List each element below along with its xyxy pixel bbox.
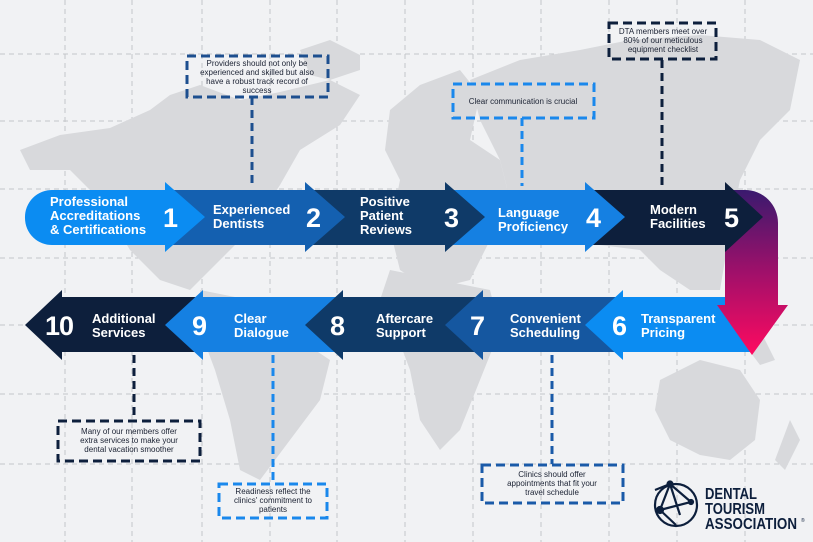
logo: TOURISM bbox=[705, 501, 765, 518]
logo: ® bbox=[801, 517, 805, 524]
top row labels: Positive bbox=[360, 194, 410, 209]
arrow 8 bbox=[305, 290, 485, 360]
callout: extra services: extra services to make your bbox=[80, 436, 178, 445]
arrow 3 bbox=[300, 182, 485, 252]
callout: readiness: patients bbox=[259, 505, 287, 514]
bottom row labels: Services bbox=[92, 325, 146, 340]
callout: readiness bbox=[219, 355, 327, 518]
callout: extra services: Many of our members offer bbox=[81, 427, 177, 436]
bottom row arrows bbox=[25, 290, 750, 360]
callout: communication: Clear communication is crucial bbox=[469, 97, 577, 106]
arrow 5 bbox=[580, 182, 763, 252]
bottom row labels: Scheduling bbox=[510, 325, 580, 340]
callout: providers: success bbox=[243, 86, 271, 95]
logo: ASSOCIATION bbox=[705, 516, 797, 533]
callout: readiness: Readiness reflect the bbox=[235, 487, 311, 496]
top row labels: 2 bbox=[306, 203, 321, 233]
arrow 4 bbox=[440, 182, 625, 252]
top row labels: Accreditations bbox=[50, 208, 140, 223]
arrow 2 bbox=[160, 182, 345, 252]
callout: scheduling bbox=[482, 355, 623, 503]
top row labels: Proficiency bbox=[498, 219, 569, 234]
bottom row labels: Additional bbox=[92, 311, 156, 326]
callout: communication bbox=[453, 84, 594, 186]
callout: extra services: dental vacation smoother bbox=[84, 445, 174, 454]
callout: scheduling: appointments that fit your bbox=[507, 479, 597, 488]
bottom row labels: 6 bbox=[612, 311, 627, 341]
bottom row labels: Dialogue bbox=[234, 325, 289, 340]
bottom row labels: Pricing bbox=[641, 325, 685, 340]
top row labels: 5 bbox=[724, 203, 739, 233]
logo bbox=[655, 482, 805, 533]
callout: equipment: DTA members meet over bbox=[619, 27, 707, 36]
callout: providers: Providers should not only be bbox=[207, 59, 308, 68]
bottom row labels: Convenient bbox=[510, 311, 581, 326]
callout: extra services bbox=[58, 355, 200, 461]
bottom row labels: 10 bbox=[45, 311, 73, 341]
logo: DENTAL bbox=[705, 486, 757, 503]
callout: scheduling: Clinics should offer bbox=[518, 470, 586, 479]
callout: equipment: 80% of our meticulous bbox=[623, 36, 703, 45]
bottom row labels: Support bbox=[376, 325, 426, 340]
callout: providers: experienced and skilled but also bbox=[200, 68, 314, 77]
bottom row labels: Aftercare bbox=[376, 311, 433, 326]
top row labels: Dentists bbox=[213, 216, 264, 231]
top row arrows bbox=[25, 182, 763, 252]
arrow: down turn bbox=[717, 190, 788, 355]
callout: readiness: clinics' commitment to bbox=[234, 496, 313, 505]
top row labels: 4 bbox=[586, 203, 601, 233]
top row labels: Facilities bbox=[650, 216, 706, 231]
arrow 6 bbox=[585, 290, 750, 360]
bottom row labels: 8 bbox=[330, 311, 345, 341]
arrow 10 bbox=[25, 290, 200, 360]
top row labels: Professional bbox=[50, 194, 128, 209]
bottom row labels: 7 bbox=[470, 311, 485, 341]
arrow 7 bbox=[445, 290, 625, 360]
callout: equipment bbox=[609, 23, 716, 186]
top row labels bbox=[50, 194, 739, 237]
world map bbox=[20, 35, 800, 480]
top row labels: & Certifications bbox=[50, 222, 146, 237]
top row labels: 3 bbox=[444, 203, 459, 233]
top row labels: Experienced bbox=[213, 202, 290, 217]
bottom row labels: Transparent bbox=[641, 311, 716, 326]
icon: globe bbox=[655, 482, 697, 526]
callout: providers bbox=[187, 56, 328, 186]
bottom row labels bbox=[45, 311, 716, 341]
callout: providers: have a robust track record of bbox=[206, 77, 309, 86]
top row labels: 1 bbox=[163, 203, 178, 233]
bottom row labels: Clear bbox=[234, 311, 267, 326]
bottom row labels: 9 bbox=[192, 311, 207, 341]
callout: equipment: equipment checklist bbox=[628, 45, 699, 54]
top row labels: Reviews bbox=[360, 222, 412, 237]
arrow 1 bbox=[25, 182, 205, 252]
callout: scheduling: travel schedule bbox=[525, 488, 579, 497]
top row labels: Patient bbox=[360, 208, 404, 223]
arrow 9 bbox=[165, 290, 345, 360]
top row labels: Language bbox=[498, 205, 559, 220]
top row labels: Modern bbox=[650, 202, 697, 217]
